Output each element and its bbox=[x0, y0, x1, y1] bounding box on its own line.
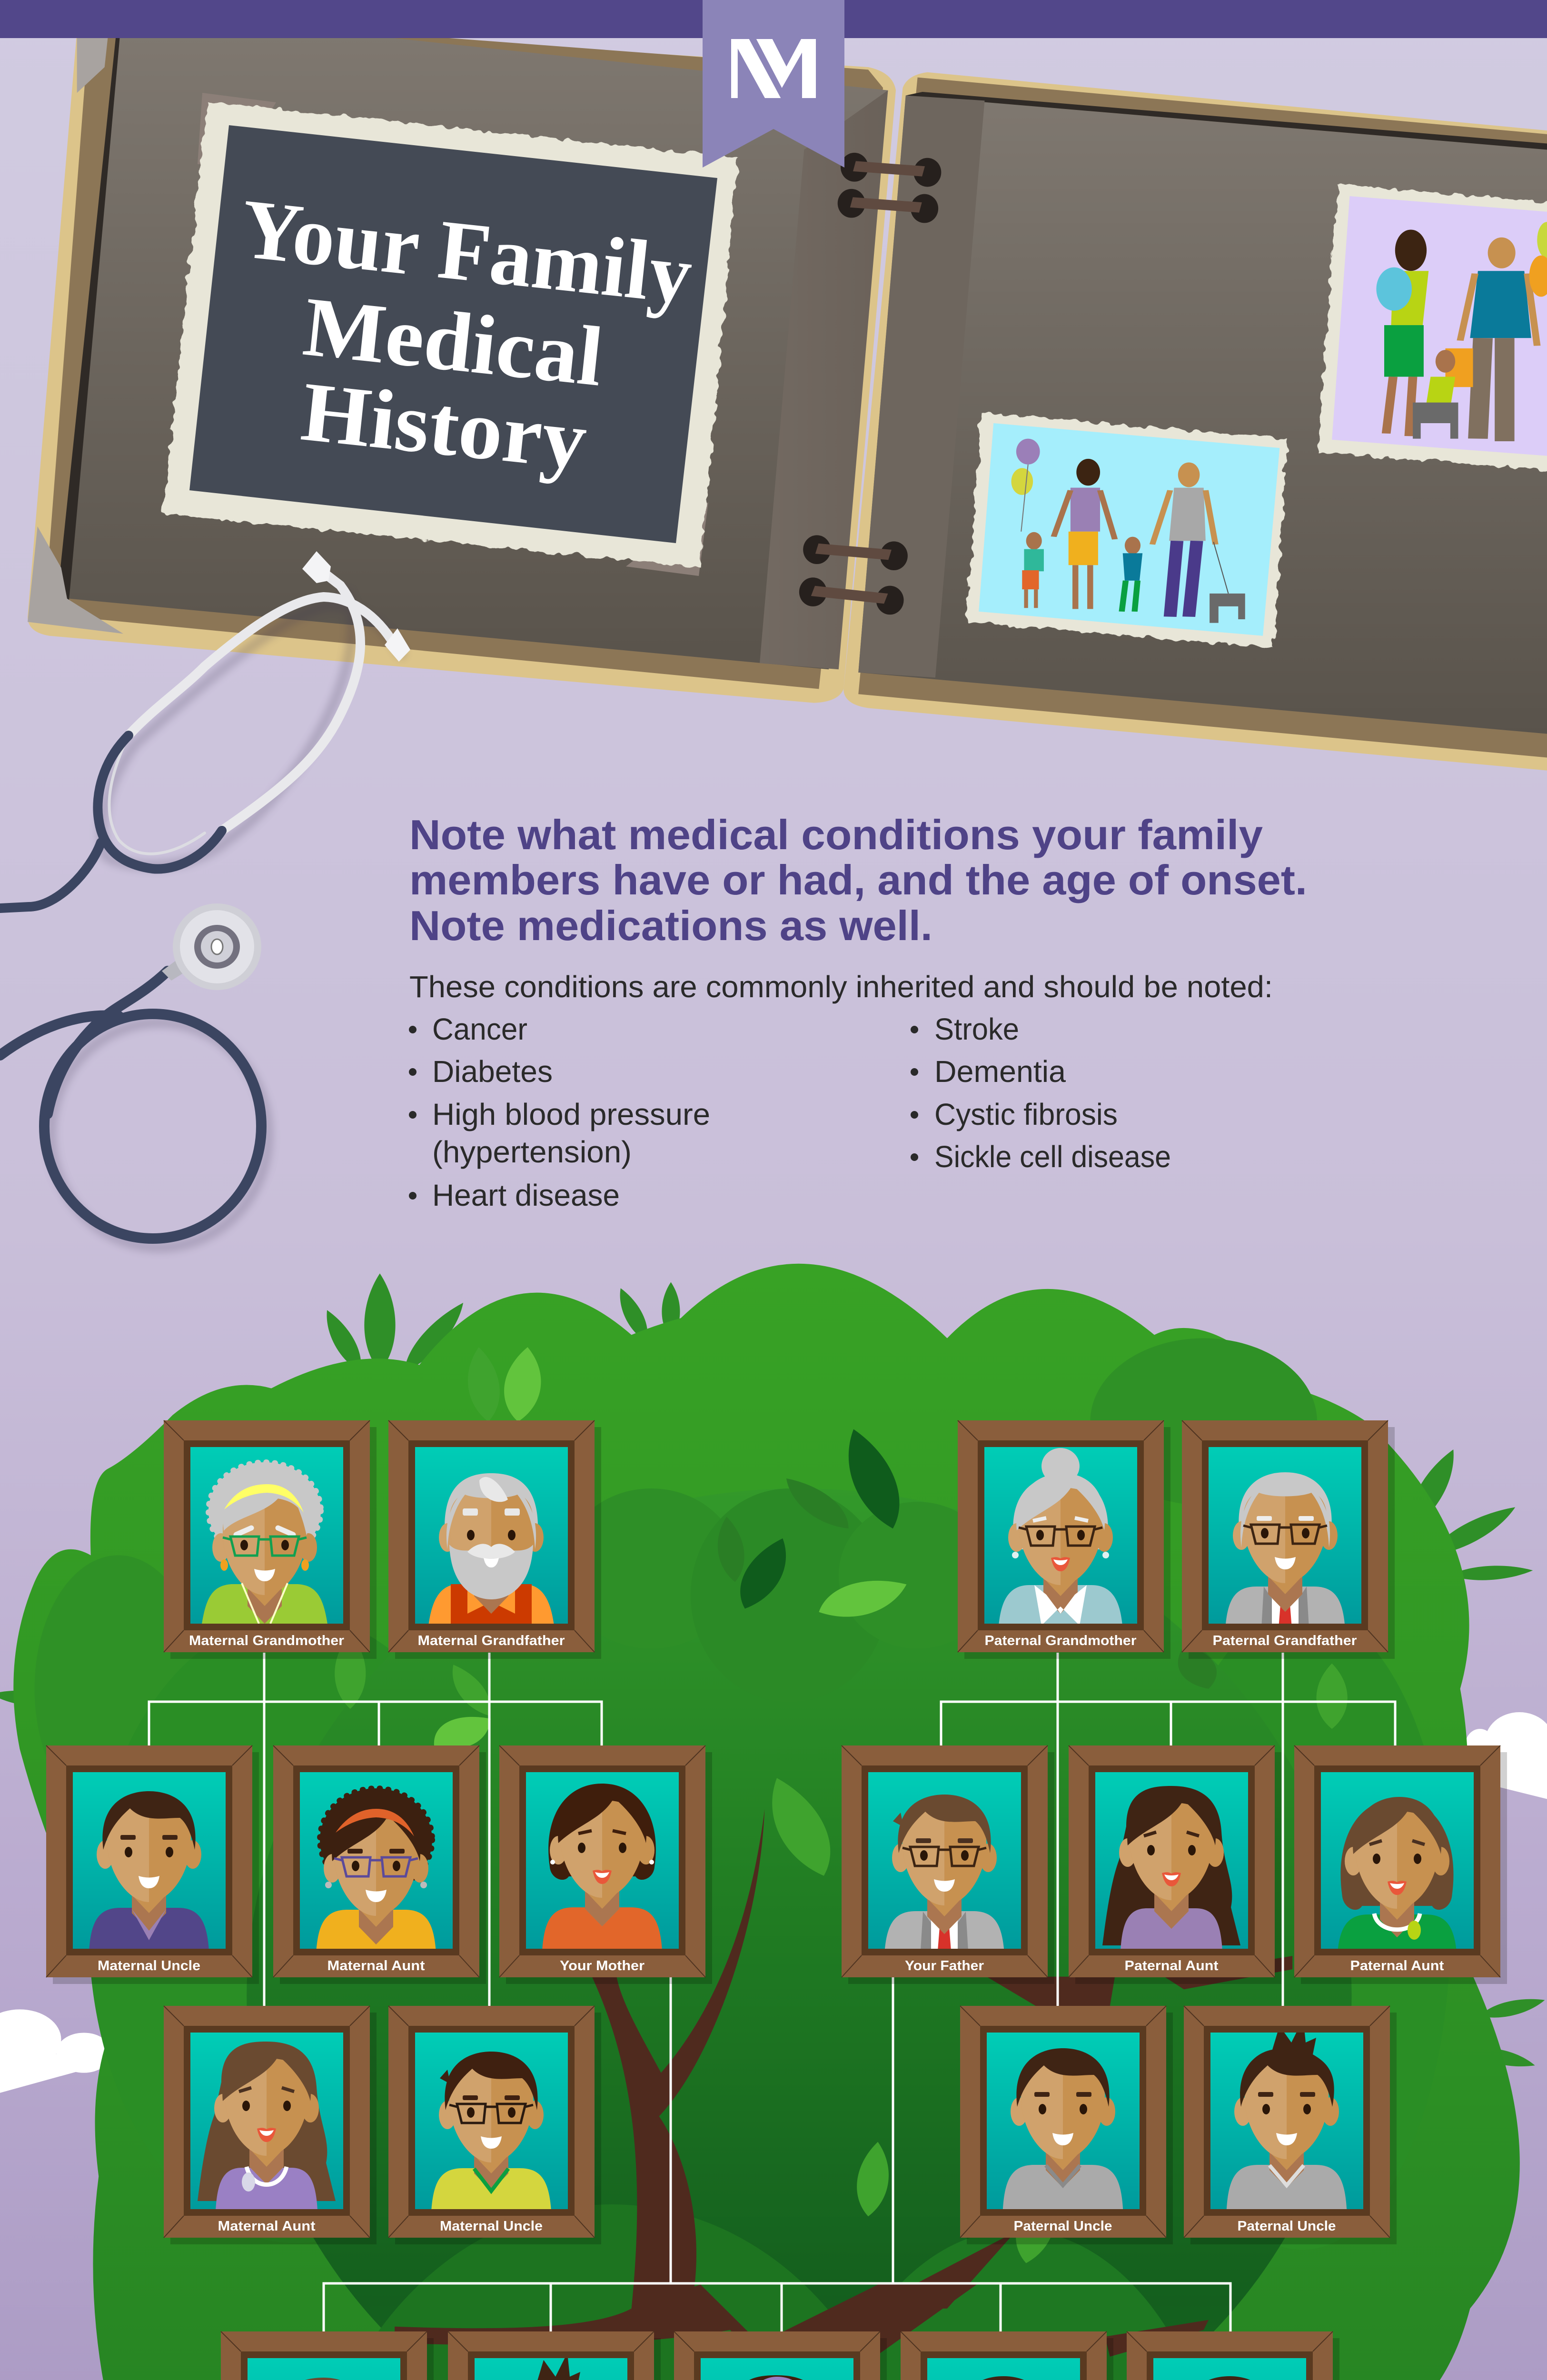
heading: Note what medical conditions your family bbox=[409, 811, 1263, 858]
portrait: Paternal Aunt, green bbox=[1294, 1745, 1507, 1984]
portrait: Sibling, argyle vest 2 bbox=[1127, 2331, 1339, 2380]
slate board bbox=[189, 125, 717, 543]
portrait: Paternal Uncle bbox=[960, 2006, 1173, 2244]
portrait: Maternal Uncle bbox=[46, 1745, 259, 1984]
top bar bbox=[0, 0, 1547, 38]
portrait: Maternal Aunt, pearl necklace: Maternal Aunt bbox=[218, 2219, 316, 2234]
portrait: Maternal Uncle: Maternal Uncle bbox=[98, 1958, 200, 1973]
portrait: Paternal Uncle, spiky hair bbox=[1184, 2006, 1397, 2244]
dark tubing bbox=[0, 735, 261, 1239]
portrait: Maternal Aunt, pearl necklace bbox=[164, 2006, 377, 2244]
portrait: Paternal Aunt, green: Paternal Aunt bbox=[1350, 1958, 1444, 1973]
conditions list: Cancer bbox=[432, 1012, 527, 1046]
conditions list: Heart disease bbox=[432, 1178, 620, 1212]
title: Your Family bbox=[237, 181, 696, 322]
portrait: Maternal Grandmother: Maternal Grandmother bbox=[189, 1633, 344, 1648]
portrait: Your Father: Your Father bbox=[905, 1958, 984, 1973]
photo: title card bbox=[163, 93, 738, 576]
chestpiece bbox=[162, 903, 261, 990]
portrait: Paternal Grandfather bbox=[1182, 1420, 1395, 1659]
portrait: Paternal Grandfather: Paternal Grandfather bbox=[1213, 1633, 1357, 1648]
conditions list: Stroke bbox=[934, 1012, 1019, 1046]
conditions list: Cystic fibrosis bbox=[934, 1097, 1118, 1131]
torn white border bbox=[163, 101, 738, 567]
portrait: Sibling, side ponytail bbox=[221, 2331, 434, 2380]
connector lines bbox=[149, 1653, 1395, 2380]
conditions list bbox=[409, 1012, 1171, 1212]
ribbon with NM logo bbox=[703, 0, 844, 168]
portrait: Maternal Grandfather: Maternal Grandfather bbox=[418, 1633, 565, 1648]
title bbox=[237, 181, 696, 487]
binder rings bbox=[799, 153, 941, 615]
portrait: Paternal Uncle, spiky hair: Paternal Uncle bbox=[1238, 2219, 1336, 2234]
portrait: Maternal Grandfather bbox=[388, 1420, 601, 1659]
title: Medical bbox=[299, 279, 607, 404]
heading: Note medications as well. bbox=[409, 902, 932, 949]
leaves behind crown bbox=[0, 1273, 1547, 2072]
portrait: Sibling, argyle vest bbox=[901, 2331, 1113, 2380]
portrait: Paternal Aunt, long dark hair: Paternal Aunt bbox=[1124, 1958, 1219, 1973]
portrait: Paternal Aunt, long dark hair bbox=[1069, 1745, 1281, 1984]
portrait: Paternal Grandmother: Paternal Grandmother bbox=[984, 1633, 1137, 1648]
portrait: Paternal Uncle: Paternal Uncle bbox=[1014, 2219, 1112, 2234]
ear tips bbox=[302, 551, 410, 662]
conditions list: Dementia bbox=[934, 1054, 1066, 1089]
conditions list: Diabetes bbox=[432, 1054, 553, 1089]
photo album bbox=[28, 31, 1547, 772]
photo: family on blue bbox=[967, 413, 1288, 648]
conditions list: High blood pressure bbox=[432, 1097, 710, 1131]
right album page bbox=[843, 72, 1547, 772]
conditions list: Sickle cell disease bbox=[934, 1140, 1171, 1174]
clouds bbox=[0, 1712, 1547, 2380]
stethoscope bbox=[0, 551, 410, 1247]
portrait: You bbox=[674, 2331, 887, 2380]
left album page bbox=[28, 31, 896, 703]
portrait: Maternal Aunt, glasses: Maternal Aunt bbox=[327, 1958, 425, 1973]
crown silhouette bbox=[13, 1264, 1520, 2380]
portrait: Maternal Uncle, glasses bbox=[388, 2006, 601, 2244]
photo: family on lilac bbox=[1317, 185, 1547, 472]
portrait: Maternal Aunt, glasses bbox=[273, 1745, 486, 1984]
portrait: Maternal Uncle, glasses: Maternal Uncle bbox=[440, 2219, 543, 2234]
title: History bbox=[298, 364, 591, 487]
heading bbox=[409, 811, 1307, 949]
portrait: Your Mother: Your Mother bbox=[560, 1958, 645, 1973]
leaves bbox=[335, 1346, 1348, 2265]
portrait: Maternal Grandmother bbox=[164, 1420, 377, 1659]
crown lobes, dark bbox=[35, 1338, 1450, 2250]
heading: members have or had, and the age of onset. bbox=[409, 856, 1307, 903]
branches bbox=[395, 1809, 1292, 2380]
conditions intro: These conditions are commonly inherited and should be noted: bbox=[409, 970, 1273, 1004]
tree crown bbox=[0, 1264, 1547, 2380]
portrait: Paternal Grandmother bbox=[958, 1420, 1170, 1659]
portrait: Your Mother bbox=[499, 1745, 712, 1984]
ear tubes bbox=[109, 566, 395, 854]
portrait: Sibling, spiky hair bbox=[448, 2331, 661, 2380]
portrait: Your Father bbox=[842, 1745, 1054, 1984]
conditions list: (hypertension) bbox=[432, 1135, 632, 1169]
